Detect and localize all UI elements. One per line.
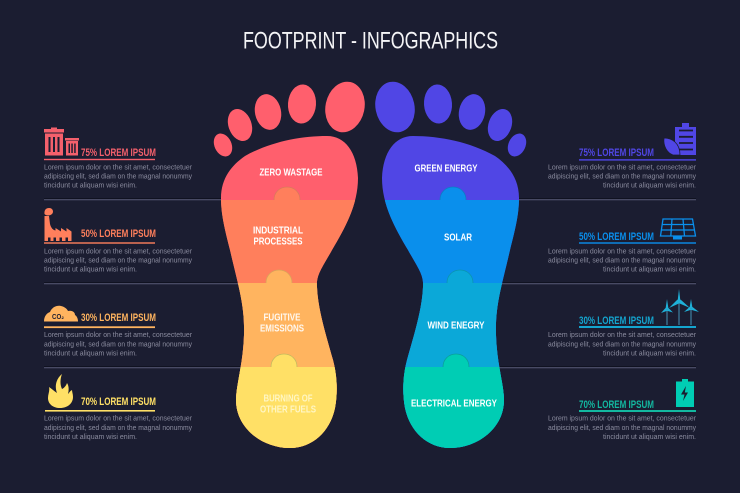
right footprint [375, 82, 526, 448]
description: adipiscing elit, sed diam on the magnal nonummy [44, 172, 192, 180]
icon: flame [48, 374, 73, 408]
description: Lorem ipsum dolor on the sit amet, consectetuer [44, 162, 192, 172]
panel: wind energy stat [548, 289, 699, 358]
description [44, 162, 192, 190]
left foot toes [210, 78, 369, 159]
left foot labels: OTHER FUELS [260, 404, 316, 416]
description: tincidunt ut aliquam wisi enim. [44, 180, 137, 190]
description: tincidunt ut aliquam wisi enim. [44, 432, 137, 441]
description: Lorem ipsum dolor on the sit amet, consectetuer [44, 414, 192, 422]
description: tincidunt ut aliquam wisi enim. [44, 348, 137, 358]
right foot labels: WIND ENEGRY [428, 320, 485, 332]
description: Lorem ipsum dolor on the sit amet, consectetuer [44, 246, 192, 256]
left foot labels: BURNING OF [264, 394, 312, 404]
description: tincidunt ut aliquam wisi enim. [44, 264, 137, 274]
right foot sole bands [382, 136, 519, 448]
left foot labels: EMISSIONS [260, 324, 304, 334]
description: tincidunt ut aliquam wisi enim. [603, 180, 696, 190]
description: adipiscing elit, sed diam on the magnal nonummy [548, 423, 696, 432]
description [548, 246, 696, 274]
description: adipiscing elit, sed diam on the magnal nonummy [548, 172, 696, 180]
icon: CO2 cloud: CO₂ [52, 312, 64, 321]
left footprint [210, 78, 370, 455]
left foot labels [253, 168, 323, 416]
left foot labels: ZERO WASTAGE [260, 168, 323, 178]
icon: battery with bolt [676, 379, 694, 407]
panel: solar stat [548, 219, 696, 274]
description: Lorem ipsum dolor on the sit amet, consectetuer [548, 330, 696, 339]
description [548, 330, 696, 358]
description: adipiscing elit, sed diam on the magnal nonummy [44, 339, 192, 348]
right foot labels: SOLAR [444, 232, 473, 244]
description: Lorem ipsum dolor on the sit amet, consectetuer [44, 330, 192, 339]
description: tincidunt ut aliquam wisi enim. [603, 264, 696, 274]
right foot labels: GREEN ENERGY [414, 164, 478, 174]
description [548, 414, 696, 441]
description [548, 162, 696, 190]
left foot labels: FUGITIVE [264, 312, 301, 324]
panel: green energy stat [548, 123, 696, 190]
right foot toes [371, 78, 530, 159]
description: adipiscing elit, sed diam on the magnal nonummy [44, 423, 192, 432]
panel: fugitive emissions stat [44, 306, 192, 358]
icon: CO2 cloud [44, 306, 78, 322]
stat heading: 50% LOREM IPSUM [579, 231, 654, 243]
description: Lorem ipsum dolor on the sit amet, consectetuer [548, 246, 696, 256]
description: Lorem ipsum dolor on the sit amet, consectetuer [548, 414, 696, 422]
right foot labels: ELECTRICAL ENERGY [411, 398, 497, 410]
left foot sole bands [221, 136, 358, 448]
panel: electrical energy stat [548, 379, 696, 441]
description: adipiscing elit, sed diam on the magnal nonummy [548, 256, 696, 264]
stat heading: 50% LOREM IPSUM [81, 228, 156, 240]
description [44, 414, 192, 441]
icon: wind turbines [661, 289, 699, 325]
left foot labels: INDUSTRIAL [253, 226, 303, 236]
divider lines [44, 199, 696, 368]
icon: trash bins [44, 128, 79, 156]
description [44, 330, 192, 358]
description: tincidunt ut aliquam wisi enim. [603, 348, 696, 358]
icon: battery with leaf [664, 123, 696, 155]
left foot labels: PROCESSES [254, 236, 303, 248]
icon: factory [44, 208, 72, 241]
description: adipiscing elit, sed diam on the magnal nonummy [44, 256, 192, 264]
title: FOOTPRINT - INFOGRAPHICS [243, 28, 498, 54]
stat heading: 70% LOREM IPSUM [81, 396, 156, 408]
stat heading: 30% LOREM IPSUM [81, 312, 156, 324]
icon: solar panel [660, 219, 696, 240]
description: adipiscing elit, sed diam on the magnal nonummy [548, 339, 696, 348]
panel: zero wastage stat [44, 128, 192, 190]
stat heading: 70% LOREM IPSUM [579, 399, 654, 411]
description: Lorem ipsum dolor on the sit amet, consectetuer [548, 162, 696, 172]
stat heading: 30% LOREM IPSUM [579, 315, 654, 327]
panel: burning of fuels stat [44, 374, 192, 441]
description [44, 246, 192, 274]
stat heading: 75% LOREM IPSUM [579, 147, 654, 159]
stat heading: 75% LOREM IPSUM [81, 147, 156, 159]
panel: industrial processes stat [44, 208, 192, 274]
description: tincidunt ut aliquam wisi enim. [603, 432, 696, 441]
right foot labels [411, 164, 497, 410]
